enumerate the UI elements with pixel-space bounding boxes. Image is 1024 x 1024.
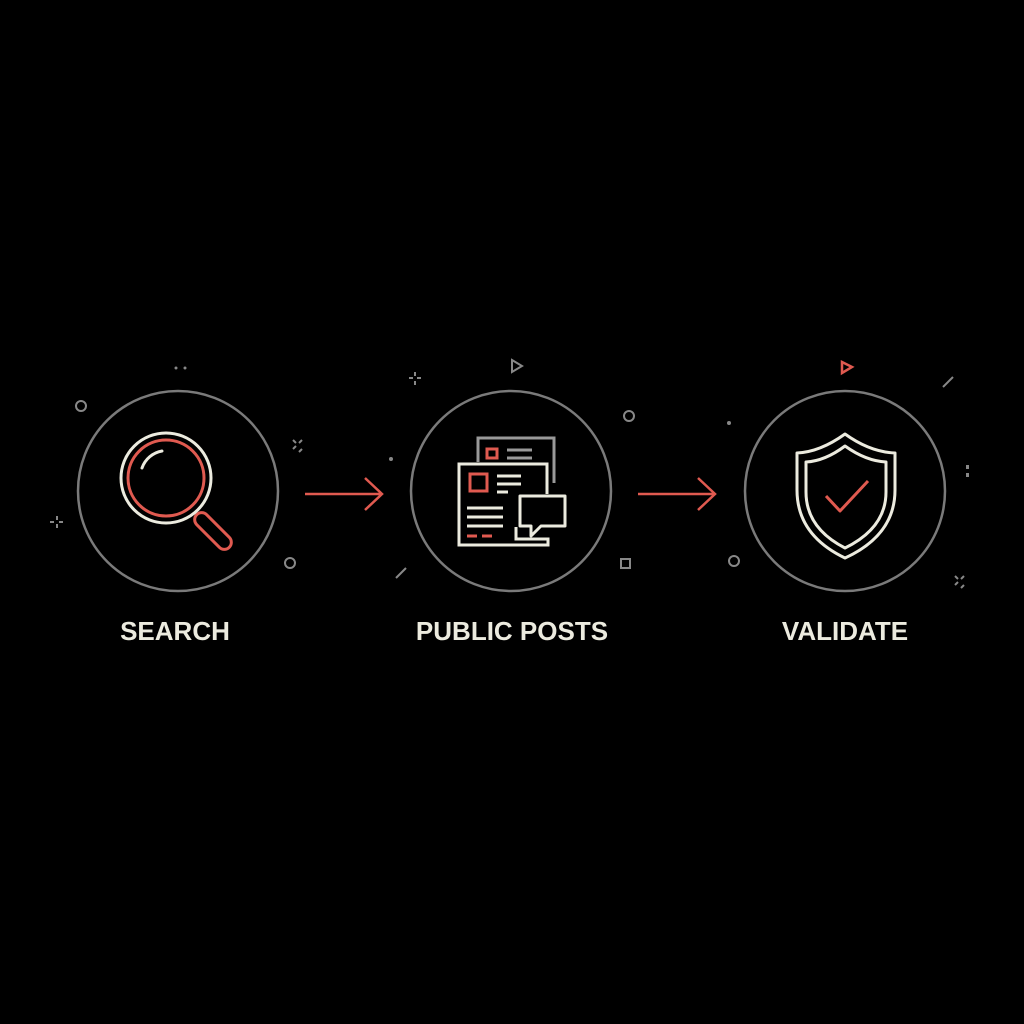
arrow 2 xyxy=(638,478,715,510)
step: public posts: PUBLIC POSTS xyxy=(416,616,608,646)
step: validate: VALIDATE xyxy=(782,616,908,646)
decorative scatter xyxy=(50,360,964,588)
step: search: SEARCH xyxy=(120,616,230,646)
arrow 1 xyxy=(305,478,382,510)
step: validate xyxy=(745,391,945,646)
icon: documents xyxy=(459,438,565,545)
step: public posts xyxy=(411,391,611,646)
icon: shield xyxy=(797,434,895,558)
icon: magnifier xyxy=(121,433,234,552)
step: search xyxy=(78,391,278,646)
